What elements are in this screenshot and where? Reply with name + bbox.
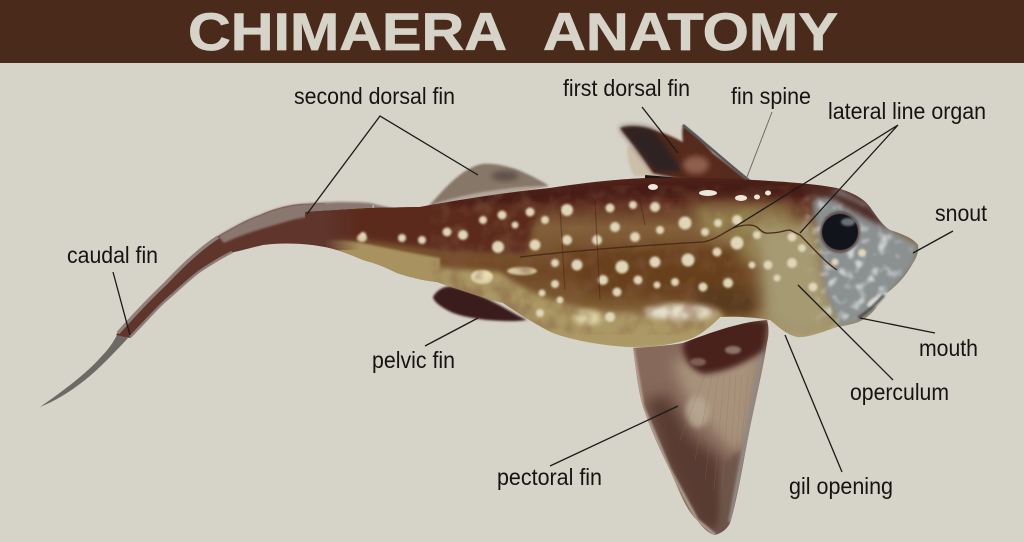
label: pectoral fin	[497, 406, 678, 490]
title	[188, 3, 838, 62]
label: first dorsal fin: first dorsal fin	[563, 75, 690, 101]
title: CHIMAERA	[188, 3, 507, 62]
fin outer dark band	[645, 395, 730, 535]
label: snout	[913, 200, 988, 253]
title: ANATOMY	[543, 3, 838, 62]
eye	[820, 211, 860, 253]
pectoral fin	[633, 320, 768, 535]
label: fin spine: fin spine	[731, 83, 811, 109]
header band	[0, 0, 1024, 63]
tail shaft	[116, 203, 325, 338]
label: snout: snout	[935, 200, 988, 226]
lateral line	[520, 225, 837, 270]
pelvic fin	[433, 287, 527, 321]
label: second dorsal fin	[294, 83, 478, 214]
pale belly	[410, 265, 725, 350]
head mottling	[805, 195, 910, 325]
tail and caudal fin	[40, 202, 395, 407]
upper caudal fin fringe	[218, 202, 395, 243]
fin light band	[672, 350, 765, 455]
tail colour bridge	[305, 210, 357, 250]
fish illustration	[40, 125, 930, 540]
label: mouth: mouth	[919, 335, 978, 361]
label: mouth	[860, 318, 978, 361]
label: gil opening	[785, 335, 893, 499]
white spots	[360, 201, 866, 322]
tail bar	[373, 205, 376, 226]
dark dorsal stripe	[356, 180, 816, 209]
head silver	[812, 190, 920, 328]
label: pectoral fin: pectoral fin	[497, 464, 602, 490]
snout and mouth shading	[858, 295, 884, 318]
body	[285, 175, 930, 350]
label: lateral line organ	[733, 98, 986, 233]
second dorsal fin	[428, 164, 549, 207]
tail filament	[40, 333, 128, 407]
fin base	[683, 319, 768, 374]
label: lateral line organ: lateral line organ	[828, 98, 986, 124]
dorsal highlights	[648, 184, 771, 201]
cream belly patches	[644, 304, 716, 320]
label: operculum: operculum	[850, 379, 949, 405]
vertical wrinkles	[560, 200, 645, 300]
label: pelvic fin: pelvic fin	[372, 347, 455, 373]
tail ventral pale stripe	[325, 240, 440, 285]
label: second dorsal fin: second dorsal fin	[294, 83, 455, 109]
label: fin spine	[731, 83, 811, 177]
fin rays	[680, 375, 748, 490]
olive gill region	[755, 225, 840, 338]
label: gil opening: gil opening	[789, 473, 893, 499]
label: caudal fin	[67, 242, 158, 335]
label: pelvic fin	[372, 318, 478, 373]
mottled texture	[430, 185, 810, 335]
brown band along the rear flank	[285, 205, 540, 254]
tail gray edges	[118, 237, 218, 333]
first dorsal fin	[620, 125, 751, 182]
label: operculum	[798, 285, 949, 405]
label: caudal fin: caudal fin	[67, 242, 158, 268]
label: first dorsal fin	[563, 75, 690, 153]
golden flank	[690, 205, 790, 265]
